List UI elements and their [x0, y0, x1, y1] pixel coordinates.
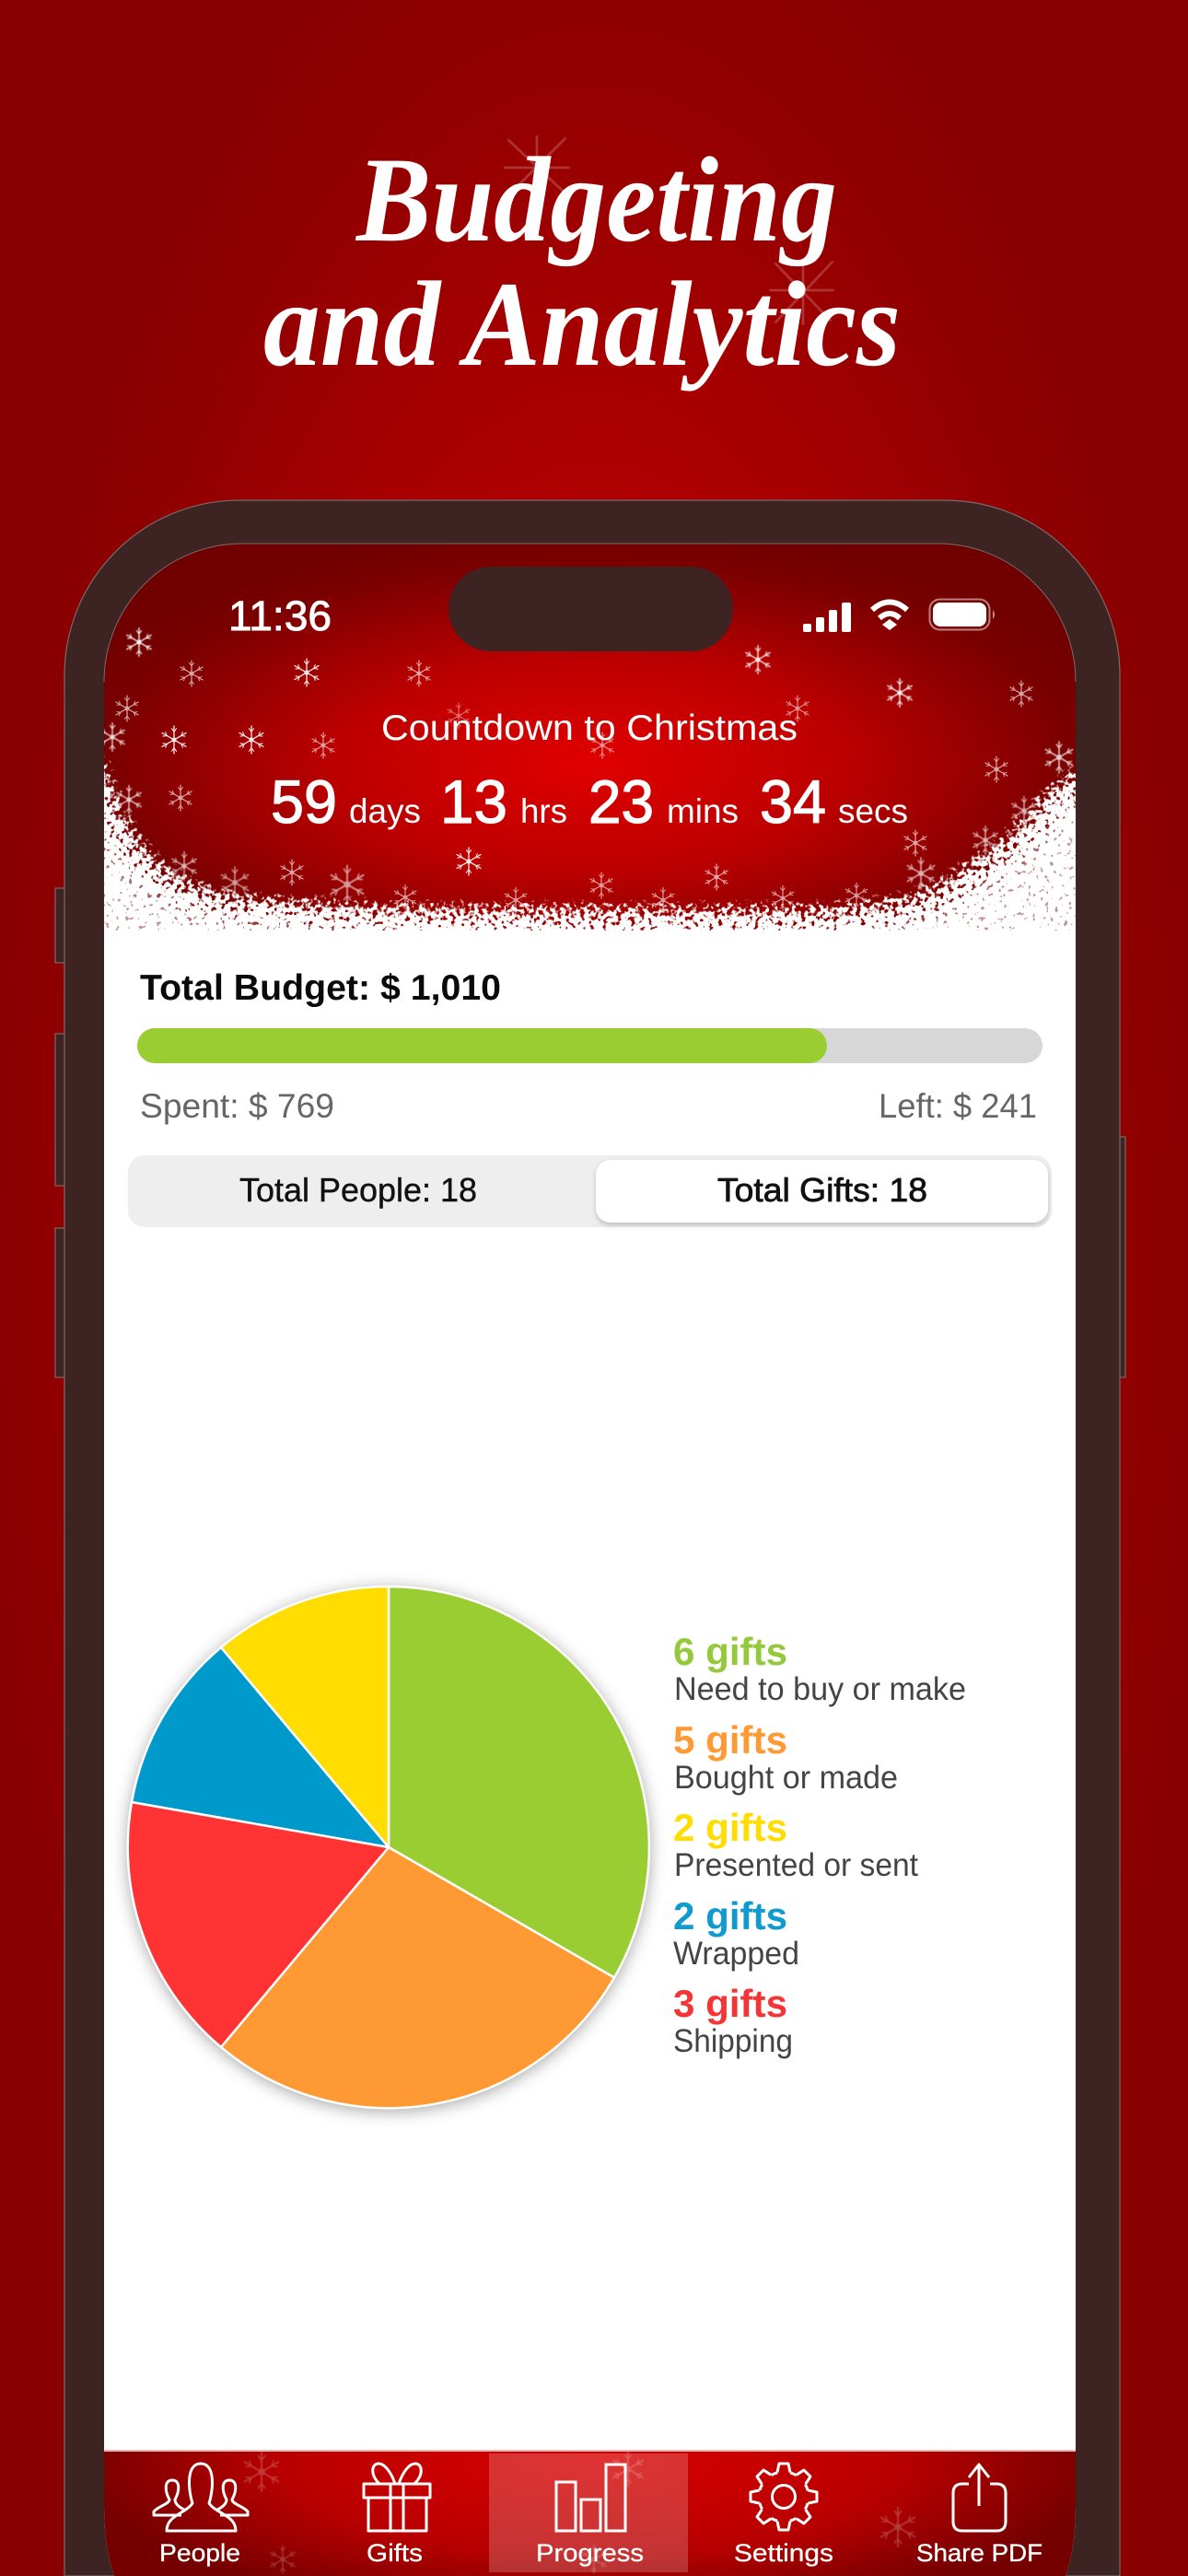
dynamic island [448, 567, 733, 651]
segmented control: Total People: 18 [239, 1171, 477, 1209]
title [263, 132, 901, 392]
tab labels: Settings [734, 2539, 833, 2567]
legend: shipping: 3 gifts [673, 1982, 787, 2025]
legend: wrapped [673, 1902, 798, 1972]
legend: presented or sent: Presented or sent [674, 1847, 918, 1883]
tab labels: Progress [536, 2539, 644, 2567]
status bar time: 11:36 [228, 592, 332, 639]
phone screen [55, 544, 1133, 2576]
screen edge outline [104, 544, 1076, 682]
segmented control: Total Gifts: 18 [717, 1171, 927, 1209]
legend: presented or sent: 2 gifts [673, 1806, 787, 1849]
status icon: battery [930, 599, 995, 630]
legend: wrapped: 2 gifts [673, 1894, 787, 1938]
legend: shipping [674, 1988, 791, 2058]
countdown values: days [349, 792, 421, 830]
tab labels: Gifts [367, 2539, 423, 2567]
tab bar [104, 2450, 1076, 2576]
icon: gift [364, 2464, 430, 2531]
legend: bought or made [674, 1725, 897, 1795]
countdown values: 59 [271, 767, 337, 836]
countdown values: secs [838, 792, 908, 830]
slice: shipping [128, 1802, 389, 2047]
countdown values: 13 [440, 767, 507, 836]
title: Budgeting [355, 132, 837, 267]
icon: share [953, 2465, 1006, 2531]
budget progress bar [137, 1028, 1042, 1063]
tab labels [161, 2543, 1042, 2567]
snowflakes [100, 628, 1073, 913]
slice: bought or made [221, 1847, 614, 2108]
legend: bought or made: Bought or made [674, 1760, 898, 1796]
countdown values: 34 [760, 767, 826, 836]
left label: Left: $ 241 [879, 1087, 1037, 1125]
legend: presented or sent [674, 1813, 918, 1876]
icon: progress bars [556, 2465, 625, 2531]
slice: need to buy or make [389, 1587, 649, 1977]
legend: need to buy or make: Need to buy or make [674, 1671, 966, 1707]
countdown heading: Countdown to Christmas [381, 708, 798, 748]
title: and Analytics [263, 256, 901, 392]
countdown values [273, 779, 907, 829]
icon: people [154, 2464, 248, 2531]
legend: need to buy or make [674, 1636, 965, 1706]
phone frame [55, 500, 1125, 2576]
legend [673, 1630, 966, 2059]
segmented control [128, 1155, 1052, 1227]
sparkles behind title [505, 136, 833, 324]
spent label: Spent: $ 769 [140, 1087, 334, 1125]
status icon: signal [803, 603, 851, 632]
countdown values: mins [667, 792, 739, 830]
legend: wrapped: Wrapped [673, 1936, 799, 1972]
legend: bought or made: 5 gifts [673, 1718, 787, 1762]
legend: shipping: Shipping [673, 2023, 793, 2059]
tab labels: People [159, 2539, 240, 2567]
selected tab highlight [489, 2453, 688, 2572]
slice: wrapped [132, 1647, 389, 1847]
icon: settings gear [751, 2464, 817, 2530]
countdown header background with snow [104, 544, 1076, 931]
countdown values: hrs [520, 792, 567, 830]
tab labels: Share PDF [916, 2539, 1042, 2567]
pie chart [128, 1587, 649, 2108]
legend: need to buy or make: 6 gifts [673, 1630, 787, 1673]
slice: presented or sent [221, 1587, 389, 1847]
countdown values: 23 [588, 767, 654, 836]
total budget heading: Total Budget: $ 1,010 [140, 968, 501, 1008]
status icon: wifi [872, 603, 907, 630]
